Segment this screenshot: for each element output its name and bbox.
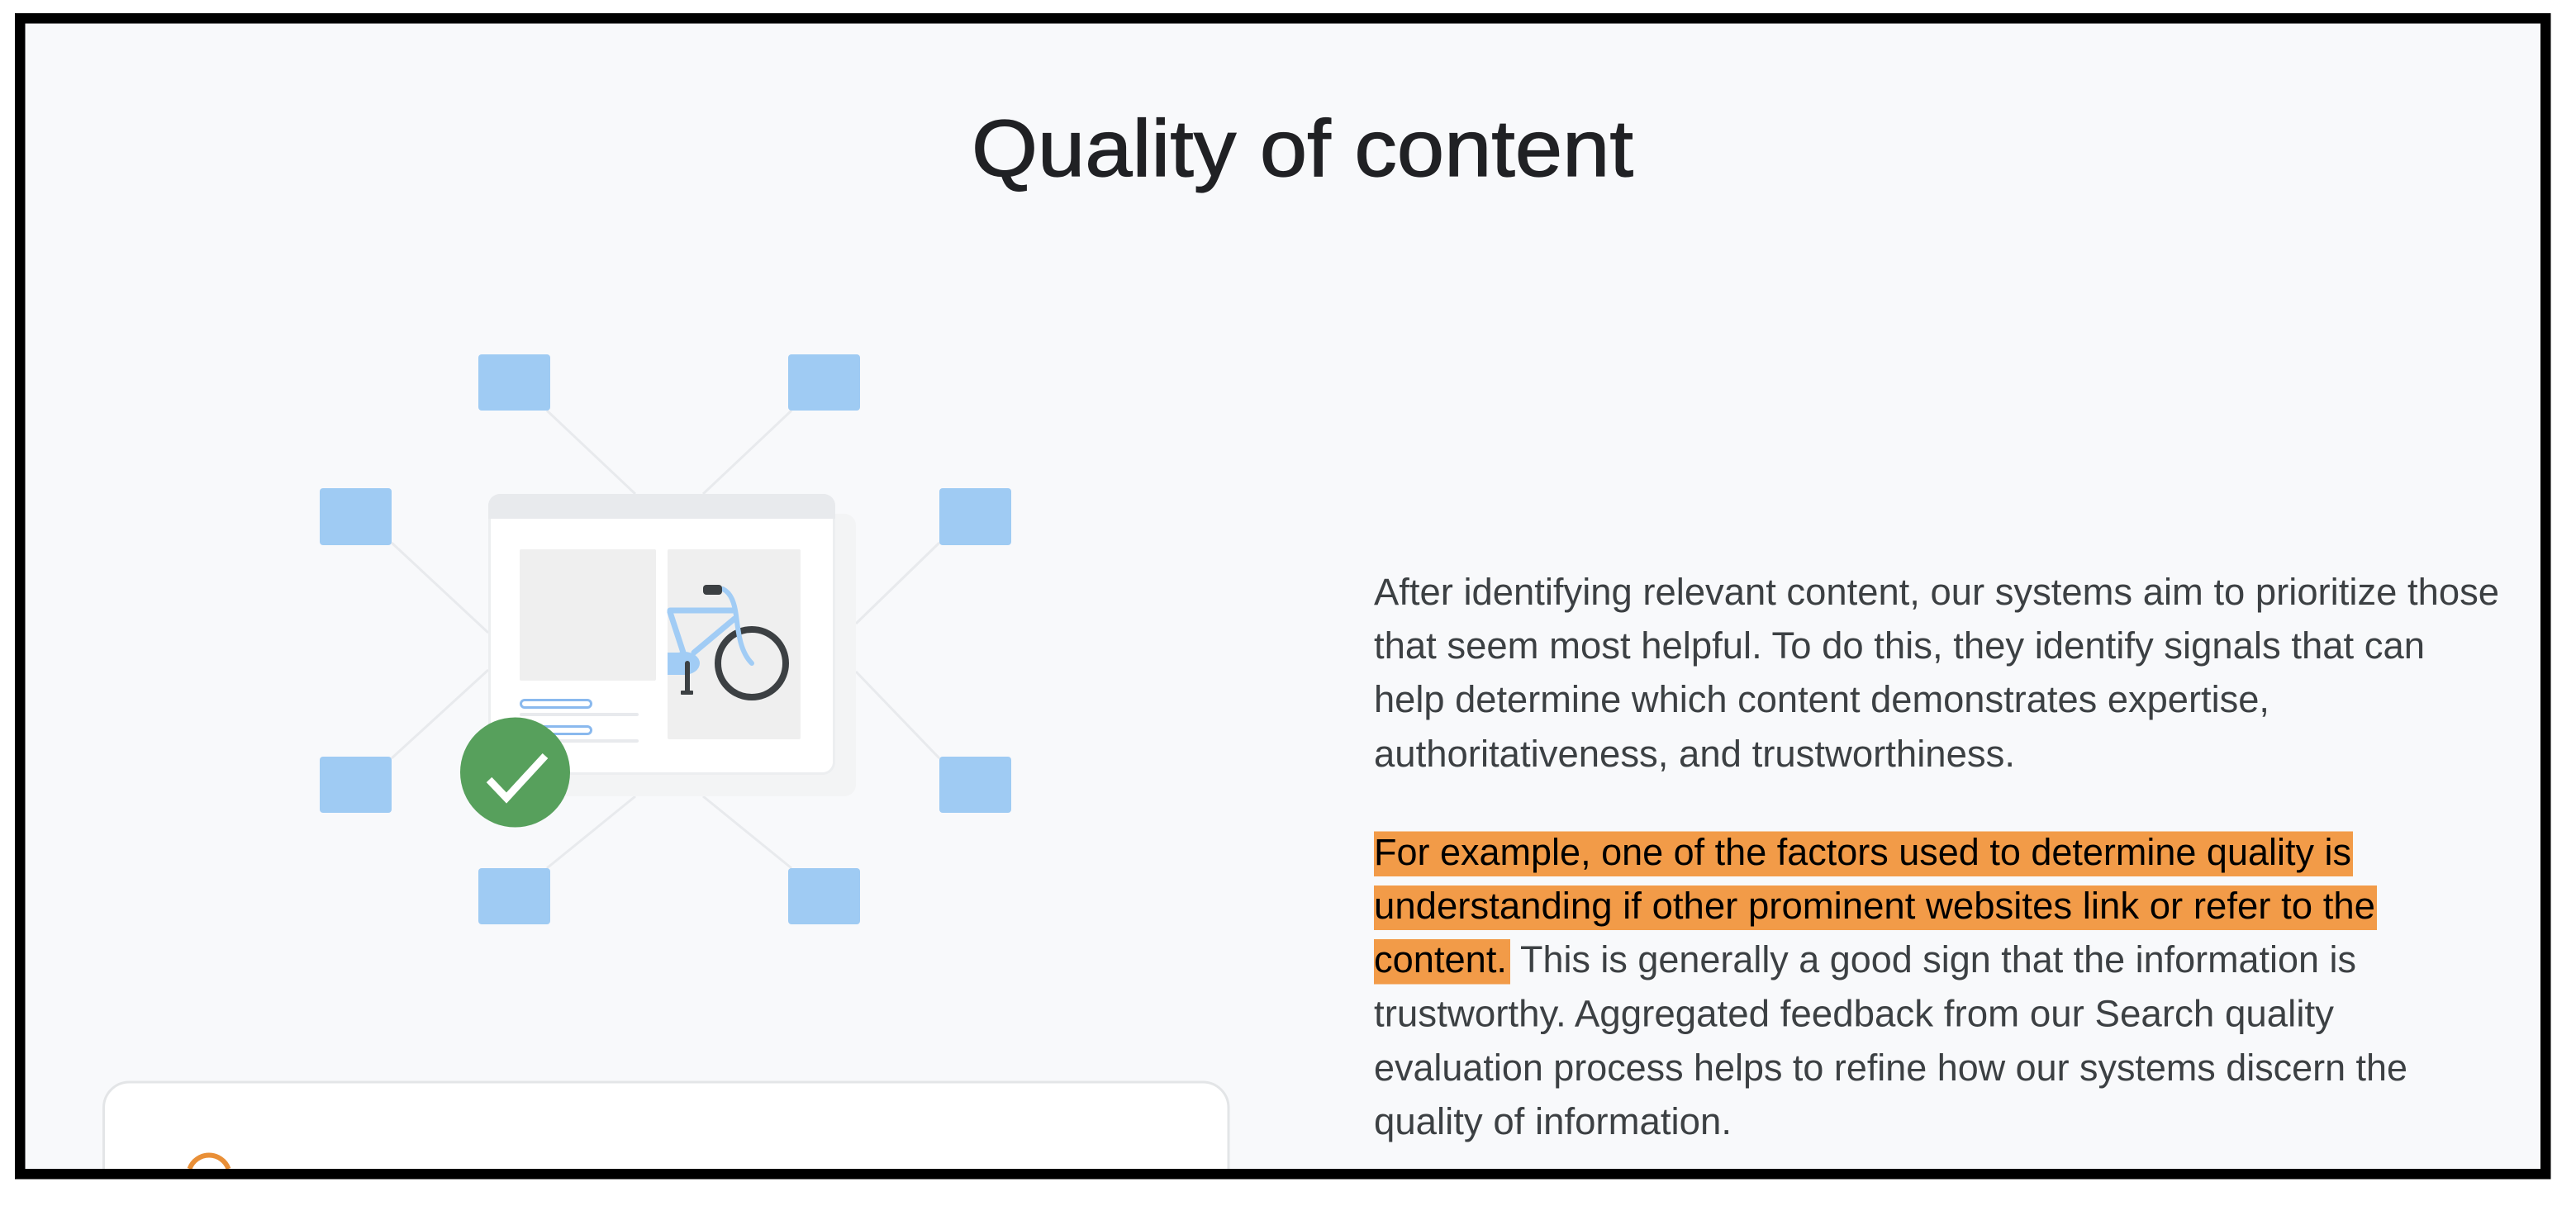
body paragraph 2: trustworthy. Aggregated feedback from our Search quality: [1374, 993, 2335, 1034]
text lines: [520, 700, 639, 743]
connector lines: [392, 411, 939, 868]
illustration: content quality network: [320, 354, 1011, 924]
highlighted passage: [1374, 831, 2377, 985]
highlighted passage: understanding if other prominent websites link or refer to the: [1374, 885, 2375, 927]
title: Quality of content: [972, 103, 1633, 193]
right image panel: [668, 549, 801, 739]
linked site squares: [320, 354, 1011, 924]
browser title bar: [488, 494, 835, 519]
body paragraph 1: help determine which content demonstrates expertise,: [1374, 678, 2269, 720]
icon: cropped orange ring: [190, 1156, 228, 1169]
icon: green check badge: [460, 717, 570, 828]
body paragraph 1: authoritativeness, and trustworthiness.: [1374, 733, 2015, 775]
panel: cropped white card: [104, 1082, 1229, 1169]
body paragraph 2: quality of information.: [1374, 1100, 1732, 1142]
body paragraph 2: evaluation process helps to refine how our systems discern the: [1374, 1047, 2407, 1089]
highlighted passage: For example, one of the factors used to determine quality is: [1374, 831, 2351, 873]
back card shadow: [512, 514, 856, 796]
body paragraph 2: This is generally a good sign that the information is: [1520, 938, 2356, 980]
body paragraph 1: After identifying relevant content, our systems aim to prioritize those: [1374, 571, 2499, 613]
icon: bicycle: [668, 585, 786, 697]
body paragraph 1: that seem most helpful. To do this, they identify signals that can: [1374, 624, 2425, 667]
body paragraph 1: [1374, 571, 2499, 775]
body paragraph 2: [1374, 938, 2407, 1142]
browser window: [488, 494, 835, 773]
highlighted passage: content.: [1374, 938, 1507, 980]
left image placeholder: [520, 549, 656, 681]
